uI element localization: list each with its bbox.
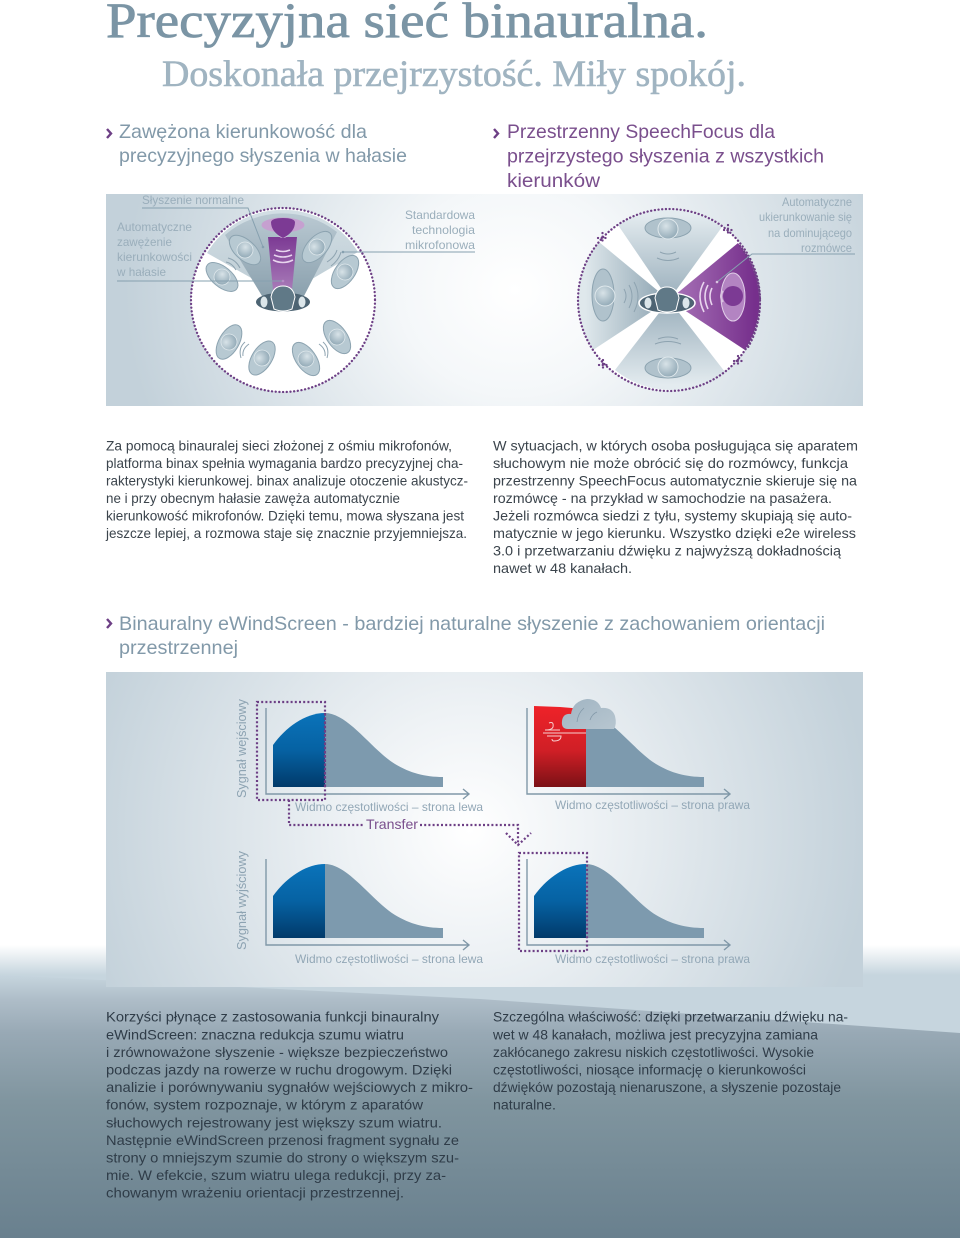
text: eWindScreen benefits: Następnie eWindScreen przenosi fragment sygnału ze [106, 1133, 459, 1148]
speaker lower left [243, 337, 281, 379]
text: special feature [492, 1010, 848, 1113]
purple speaker [262, 218, 304, 238]
panel: directional diagrams [106, 194, 863, 406]
purple right wedge [669, 243, 759, 350]
top wedge [618, 209, 722, 300]
text: eWindScreen benefits: strony o mniejszym szumie do strony o większym szu- [106, 1150, 459, 1166]
y label: output signal: Sygnał wyjściowy [234, 851, 249, 950]
heading: spatial SpeechFocus: Przestrzenny SpeechFocus dla [507, 121, 775, 143]
heading: spatial SpeechFocus: przejrzystego słyszenia z wszystkich [507, 146, 824, 168]
transfer connector: Transfer [366, 816, 418, 832]
diagram: spatial SpeechFocus [578, 209, 760, 391]
text: special feature: Szczególna właściwość: dzięki przetwarzaniu dźwięku na- [493, 1010, 848, 1025]
heading: binaural eWindScreen [107, 613, 825, 659]
icon: wind cloud [543, 699, 616, 741]
label: normal hearing: Słyszenie normalne [142, 193, 244, 207]
text: eWindScreen benefits: fonów, system rozpoznaje, w którym z aparatów [106, 1098, 423, 1113]
outer microphone wedge [207, 210, 358, 296]
background slanted dark band [0, 975, 960, 1238]
heading: narrowed directionality: precyzyjnego słyszenia w hałasie [119, 145, 407, 167]
purple speaker right [721, 273, 745, 321]
text: eWindScreen benefits: podczas jazdy na rowerze w ruchu drogowym. Dzięki [106, 1062, 452, 1078]
dotted corner markers [598, 225, 760, 370]
speaker upper right [297, 226, 337, 268]
page background fade [0, 945, 960, 975]
text: spatial SpeechFocus: słuchowym nie może obrócić się do rozmówcy, funkcja [493, 456, 848, 471]
text: eWindScreen benefits: mie. W efekcie, szum wiatru ulega redukcji, przy za- [106, 1168, 446, 1183]
speaker lower far right [318, 316, 356, 358]
speaker lower far left [211, 321, 247, 363]
bottom speaker [645, 357, 691, 378]
chart: input left [266, 708, 483, 814]
sound waves [226, 250, 341, 358]
text: spatial SpeechFocus: przestrzenny SpeechFocus automatycznie skieruje się na [493, 474, 857, 488]
heading: narrowed directionality: Zawężona kierunkowość dla [119, 121, 367, 143]
text: narrowed directionality: platforma binax spełnia wymagania bardzo precyzyjnej cha- [106, 456, 463, 471]
purple focused beam [268, 237, 297, 290]
label: automatic focus on speaker: Automatyczne [782, 195, 852, 209]
top speaker [645, 218, 691, 239]
listener [640, 287, 694, 312]
text: spatial SpeechFocus: nawet w 48 kanałach. [493, 561, 632, 576]
chart: input right with wind noise [527, 699, 750, 812]
text: narrowed directionality: rakterystyki kierunkowej. binax analizuje otoczenie akustycz- [106, 474, 468, 488]
text: spatial SpeechFocus: W sytuacjach, w których osoba posługująca się aparatem [493, 438, 858, 454]
label: automatic narrowing: zawężenie [117, 235, 172, 249]
text: special feature: naturalne. [493, 1098, 556, 1113]
text: spatial SpeechFocus: Jeżeli rozmówca siedzi z tyłu, systemy skupiają się auto- [493, 508, 852, 524]
heading: binaural eWindScreen: Binauralny eWindScreen - bardziej naturalne słyszenie z zachowaniem orientacji [119, 613, 825, 635]
label: automatic narrowing: w hałasie [116, 265, 166, 279]
middle normal hearing wedge [225, 213, 337, 296]
text: special feature: częstotliwości, niosące informację o kierunkowości [493, 1062, 806, 1078]
text: eWindScreen benefits: Korzyści płynące z zastosowania funkcji binauralny [106, 1010, 439, 1025]
text: eWindScreen benefits: analizie i porównywaniu sygnałów wejściowych z mikro- [106, 1080, 473, 1095]
label: standard microphone technology [342, 208, 475, 253]
chart: input left: Widmo częstotliwości – strona lewa [295, 800, 483, 814]
text: eWindScreen benefits [106, 1010, 473, 1201]
text: eWindScreen benefits: słuchowych rejestrowany jest większy szum wiatru. [106, 1115, 442, 1130]
sound waves in beam [273, 250, 293, 262]
label: automatic focus on speaker: na dominującego [768, 226, 852, 240]
y label: input signal: Sygnał wejściowy [234, 699, 249, 798]
transfer connector [257, 702, 531, 845]
label: automatic narrowing: Automatyczne [117, 220, 192, 234]
label: standard microphone technology: Standardowa [405, 208, 475, 222]
text: special feature: dźwięków pozostają nienaruszone, a słyszenie pozostaje [493, 1080, 841, 1095]
chart: output left [266, 859, 483, 966]
chart: output right [519, 853, 750, 966]
text: narrowed directionality: ne i przy obecnym hałasie zawęża automatycznie [106, 491, 400, 506]
text: spatial SpeechFocus [493, 438, 858, 576]
label: automatic narrowing [116, 220, 284, 282]
label: standard microphone technology: mikrofonowa [405, 238, 475, 252]
heading: spatial SpeechFocus: kierunków [507, 170, 601, 192]
heading: binaural eWindScreen: przestrzennej [119, 637, 238, 659]
label: automatic narrowing: kierunkowości [117, 250, 192, 264]
dotted circle [578, 209, 760, 391]
label: automatic focus on speaker: ukierunkowanie się [759, 210, 852, 224]
label: automatic focus on speaker: rozmówce [801, 241, 852, 255]
title [106, 0, 746, 95]
title: Doskonała przejrzystość. Miły spokój. [162, 54, 746, 95]
bottom wedge [615, 300, 725, 390]
text: special feature: wet w 48 kanałach, możliwa jest precyzyjna zamiana [492, 1027, 818, 1042]
chart: input right with wind noise: Widmo częstotliwości – strona prawa [555, 798, 750, 812]
text: spatial SpeechFocus: rozmówcę - na przykład w samochodzie na pasażera. [493, 491, 832, 506]
label: automatic focus on speaker [716, 195, 855, 283]
text: eWindScreen benefits: eWindScreen: znaczna redukcja szumu wiatru [106, 1027, 404, 1042]
text: narrowed directionality: jeszcze lepiej, a rozmowa staje się znacznie przyjemniejsza. [105, 526, 467, 541]
text: narrowed directionality [105, 438, 468, 541]
left speaker [592, 269, 615, 321]
text: special feature: zakłócanego zakresu niskich częstotliwości. Wysokie [493, 1045, 814, 1060]
listener outline [639, 293, 695, 313]
listener [256, 286, 310, 312]
diagram: narrowed directionality [191, 208, 375, 392]
heading: narrowed directionality [107, 121, 407, 167]
text: spatial SpeechFocus: matycznie w jego kierunku. Wszystko dzięki e2e wireless [493, 526, 856, 541]
panel: spectrum charts [106, 672, 863, 987]
left wedge [578, 242, 669, 350]
page background light band [0, 975, 960, 1040]
text: eWindScreen benefits: chowanym wrażeniu orientacji przestrzennej. [106, 1186, 404, 1201]
text: narrowed directionality: kierunkowość mikrofonów. Dzięki temu, mowa słyszana jest [106, 508, 464, 524]
label: normal hearing [142, 193, 264, 248]
label: standard microphone technology: technologia [412, 223, 475, 237]
speaker upper left [224, 230, 266, 270]
text: spatial SpeechFocus: 3.0 i przetwarzaniu dźwięku z najwyższą dokładnością [493, 544, 841, 558]
sound waves [624, 252, 712, 344]
speaker lower right [287, 338, 325, 380]
dotted circle [191, 208, 375, 392]
speaker far right [326, 251, 364, 293]
heading: spatial SpeechFocus [494, 121, 824, 192]
text: narrowed directionality: Za pomocą binauralej sieci złożonej z ośmiu mikrofonów, [106, 438, 452, 454]
speaker far left [201, 257, 243, 297]
text: eWindScreen benefits: i zrównoważone słyszenie - większe bezpieczeństwo [106, 1045, 448, 1060]
chart: output right: Widmo częstotliwości – strona prawa [555, 952, 750, 966]
chart: output left: Widmo częstotliwości – strona lewa [295, 952, 483, 966]
